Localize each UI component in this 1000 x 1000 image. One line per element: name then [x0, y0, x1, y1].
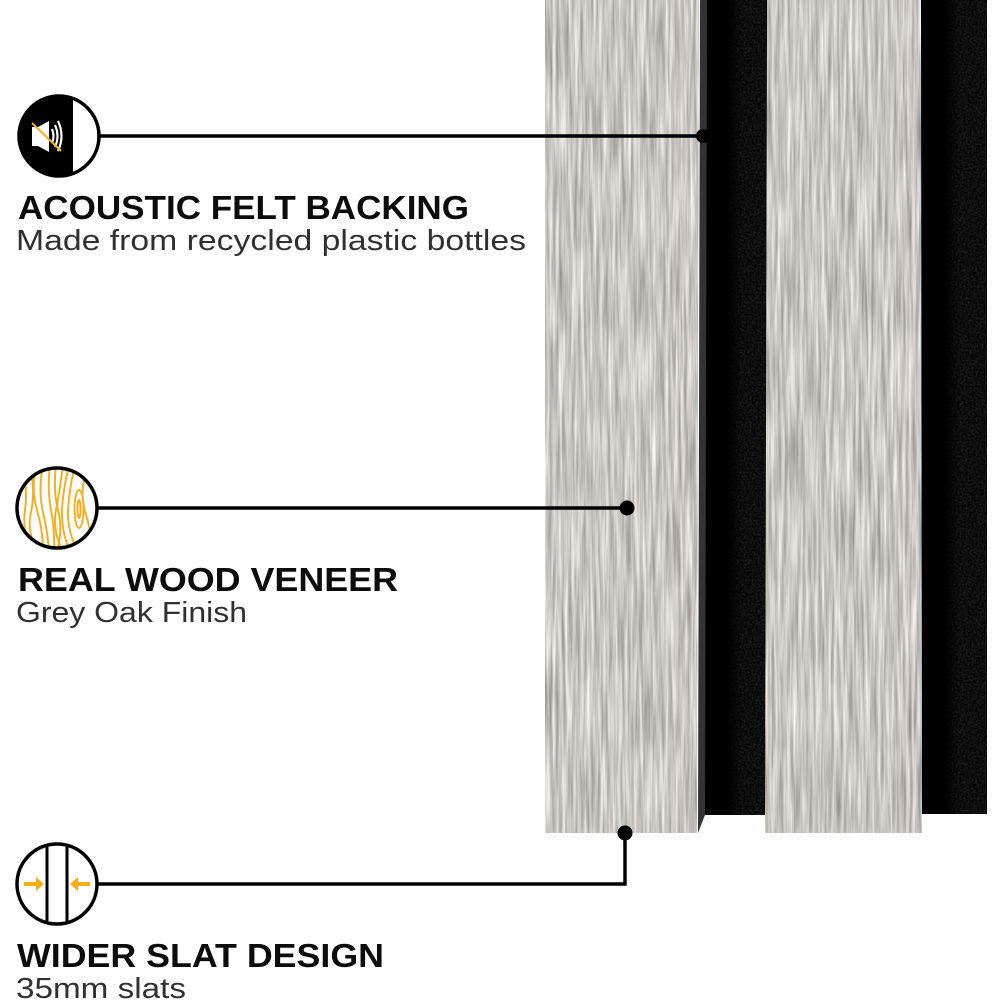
leader line: wood veneer: [96, 500, 634, 516]
leader line: acoustic felt: [98, 129, 710, 143]
heading: real wood veneer: REAL WOOD VENEER: [18, 561, 398, 598]
icon: slat width arrows: [17, 844, 97, 924]
leader line: slat width: [96, 826, 632, 884]
wall panel photo: [545, 0, 987, 833]
wood slat: right: [765, 0, 923, 833]
text: made from recycled plastic bottles: Made from recycled plastic bottles: [16, 225, 526, 257]
text: grey oak finish: Grey Oak Finish: [16, 597, 247, 629]
icon: wood grain: [17, 465, 97, 552]
wood slat: left: [545, 0, 701, 833]
slat side edge: [698, 0, 707, 833]
heading: wider slat design: WIDER SLAT DESIGN: [17, 937, 384, 974]
heading: acoustic felt backing: ACOUSTIC FELT BACKING: [18, 189, 469, 226]
felt backing strip: right: [921, 0, 987, 814]
icon: muted speaker on felt: [19, 96, 99, 176]
felt backing strip: middle: [705, 0, 767, 815]
